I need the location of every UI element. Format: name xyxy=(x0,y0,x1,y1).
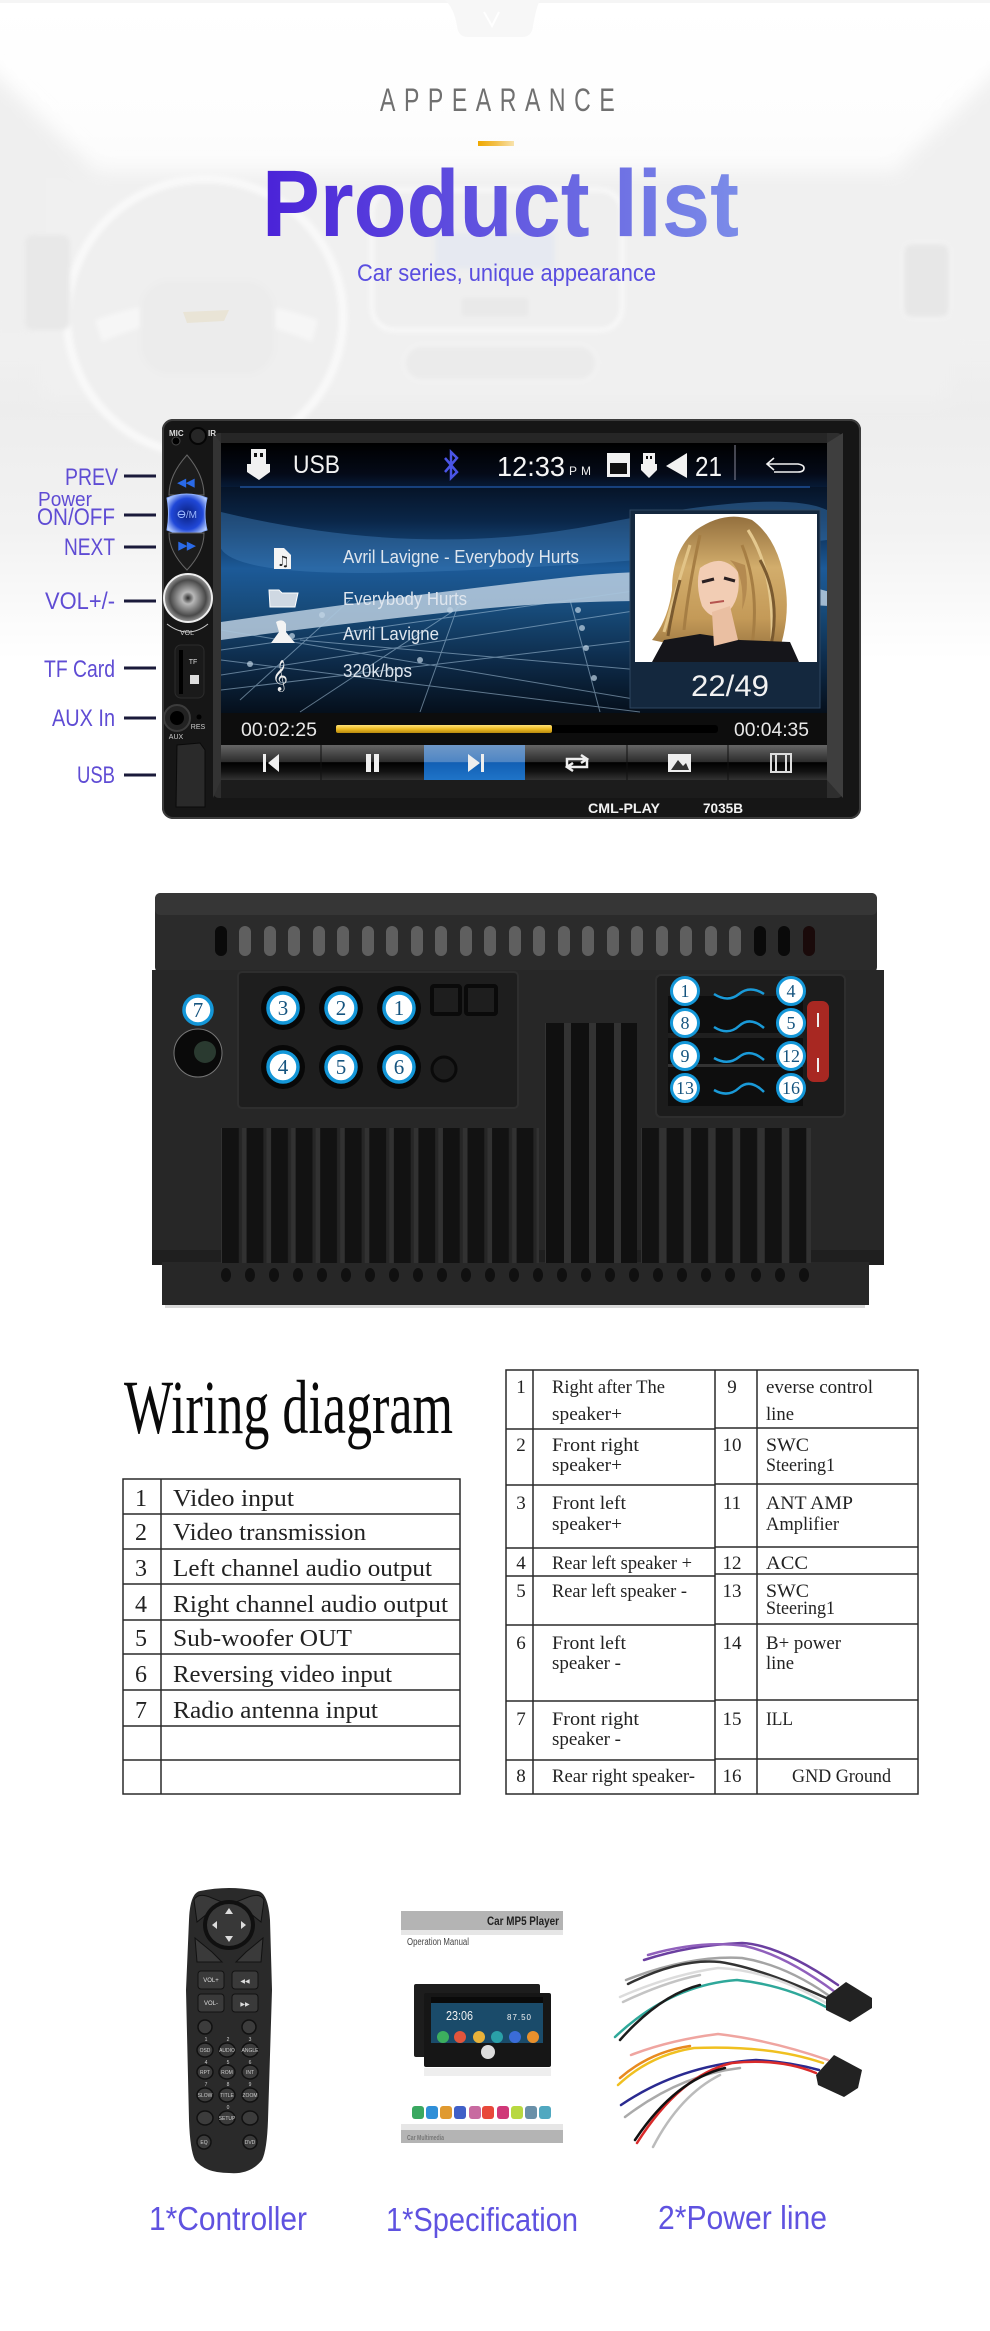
numbers: 14 xyxy=(722,1633,742,1654)
album text: Everybody Hurts xyxy=(343,589,467,609)
prev button xyxy=(169,455,204,495)
label: Power ON/OFF xyxy=(37,489,156,531)
icon: person xyxy=(271,620,295,643)
artist text: Avril Lavigne xyxy=(343,624,439,644)
next button: ▶▶ xyxy=(178,540,196,552)
numbers: 11 xyxy=(723,1493,741,1514)
prev button: ◀◀ xyxy=(177,477,195,489)
numeric key labels: ANGLE xyxy=(242,2048,259,2054)
right descriptions: SWC xyxy=(766,1435,809,1456)
icon: back arrow xyxy=(767,458,804,472)
iso connector panel: 4 xyxy=(786,981,796,1001)
volume number: 21 xyxy=(695,451,722,482)
aux jack: RES xyxy=(191,724,206,731)
clock: 12:33 xyxy=(497,451,565,482)
numeric key labels: INT xyxy=(246,2070,254,2076)
table text: 3 xyxy=(135,1556,147,1582)
lower connector xyxy=(816,2055,862,2097)
left descriptions: speaker - xyxy=(552,1653,621,1674)
left descriptions: Front right xyxy=(552,1709,640,1730)
right descriptions: ANT AMP xyxy=(766,1493,853,1514)
label: NEXT: NEXT xyxy=(64,534,115,561)
icon: folder xyxy=(269,590,298,607)
numeric key labels: OSD xyxy=(200,2048,211,2054)
numbers: 15 xyxy=(722,1709,742,1730)
numeric key labels xyxy=(198,2037,259,2146)
photo xyxy=(635,514,817,662)
table text: 7 xyxy=(135,1698,147,1724)
icon: film xyxy=(771,754,791,772)
lower harness wires xyxy=(618,2034,828,2147)
table text: Left channel audio output xyxy=(173,1556,432,1582)
rca sockets numbered: 4 xyxy=(278,1055,289,1079)
fuse xyxy=(807,1001,829,1082)
numeric key labels: AUDIO xyxy=(219,2048,235,2054)
rca sockets numbered: 6 xyxy=(394,1055,404,1079)
header background: faded car dashboard xyxy=(0,0,990,660)
model text: 7035B xyxy=(703,800,743,816)
left descriptions: speaker - xyxy=(552,1729,621,1750)
numeric keys xyxy=(197,2020,258,2149)
label: VOL+/- xyxy=(45,588,156,615)
heading: APPEARANCE: APPEARANCE xyxy=(380,82,615,118)
numbers: 12 xyxy=(722,1553,742,1574)
right descriptions: everse control xyxy=(766,1377,873,1398)
numbers: 8 xyxy=(516,1766,526,1787)
upper connector xyxy=(826,1982,872,2022)
right descriptions: ILL xyxy=(766,1709,793,1730)
iso connector panel: 13 xyxy=(676,1078,694,1098)
top keys xyxy=(194,1895,264,1962)
icon: treble clef: 𝄞 xyxy=(272,659,288,692)
table text: Sub-woofer OUT xyxy=(173,1626,352,1652)
heading: Wiring diagram: Wiring diagram xyxy=(124,1366,453,1450)
left descriptions: Rear left speaker + xyxy=(552,1553,692,1574)
numbers: 13 xyxy=(722,1581,742,1602)
caption: specification: 1*Specification xyxy=(386,2201,578,2238)
stereo image: 87.50 xyxy=(507,2013,532,2022)
stereo image: 23:06 xyxy=(446,2008,473,2023)
bottom vent holes xyxy=(221,1268,809,1282)
tf card slot: TF xyxy=(189,659,197,666)
d-pad xyxy=(203,1900,255,1950)
icon: repeat xyxy=(567,755,587,771)
numbers: 16 xyxy=(722,1766,742,1787)
tf card slot xyxy=(175,645,204,698)
head unit front view xyxy=(162,419,861,819)
table text: Reversing video input xyxy=(173,1662,392,1688)
right descriptions: Amplifier xyxy=(766,1514,840,1535)
table text: 2 xyxy=(135,1520,147,1546)
clock pm: PM xyxy=(569,464,591,478)
mic and ir: MIC xyxy=(169,429,184,438)
track title: Avril Lavigne - Everybody Hurts xyxy=(343,547,579,567)
label: Power ON/OFF: ON/OFF xyxy=(37,504,115,531)
rca panel xyxy=(238,972,518,1108)
right descriptions: Steering1 xyxy=(766,1598,835,1619)
status bar xyxy=(221,443,827,487)
usb port xyxy=(176,743,205,807)
right descriptions xyxy=(766,1377,891,1787)
numbers: 2 xyxy=(516,1435,526,1456)
right descriptions: ACC xyxy=(766,1553,808,1574)
iso connector panel: 16 xyxy=(782,1078,800,1098)
mic and ir xyxy=(169,428,216,445)
left descriptions: Rear right speaker- xyxy=(552,1766,695,1787)
table text xyxy=(135,1486,448,1724)
antenna socket: 7 xyxy=(193,998,203,1022)
icon: next xyxy=(468,754,484,772)
antenna socket xyxy=(174,996,222,1077)
label: USB xyxy=(77,762,156,789)
numbers: 10 xyxy=(722,1435,742,1456)
manual header xyxy=(401,1911,563,1935)
numeric key labels: 0 xyxy=(227,2105,230,2111)
icon: usb small xyxy=(641,453,657,478)
stereo image xyxy=(414,1984,551,2076)
left descriptions: speaker+ xyxy=(552,1514,622,1535)
rca sockets numbered: 1 xyxy=(394,996,404,1020)
iso connector panel xyxy=(656,975,845,1117)
numeric key labels: 8 xyxy=(227,2082,230,2088)
subtitle: Car series, unique appearance xyxy=(357,260,656,287)
title: Product list: Product list xyxy=(262,151,739,257)
model text xyxy=(588,800,743,816)
numeric key labels: SLOW xyxy=(198,2093,213,2099)
wave marks xyxy=(714,990,764,1094)
round hole xyxy=(432,1057,456,1081)
numbers: 5 xyxy=(516,1581,526,1602)
right descriptions: line xyxy=(766,1404,794,1425)
top vent slots xyxy=(215,926,815,956)
key labels: ◀◀ xyxy=(240,1979,250,1985)
numeric key labels: SETUP xyxy=(219,2116,236,2122)
table: iso wiring xyxy=(506,1370,918,1794)
key labels: ▶▶ xyxy=(240,2002,250,2008)
manual subtitle: Operation Manual xyxy=(407,1937,469,1948)
side controls xyxy=(164,428,216,807)
numbers: 4 xyxy=(516,1553,526,1574)
chassis xyxy=(152,893,884,1308)
video connector outline xyxy=(432,986,496,1014)
operation manual xyxy=(401,1911,563,2143)
mic and ir: IR xyxy=(208,429,216,438)
label: NEXT xyxy=(64,534,156,561)
icon: usb xyxy=(247,449,270,480)
rca sockets numbered: 3 xyxy=(278,996,288,1020)
numeric key labels: 2 xyxy=(227,2037,230,2043)
icon: previous xyxy=(263,754,279,772)
control buttons xyxy=(221,745,827,780)
numbers: 6 xyxy=(516,1633,526,1654)
progress fill xyxy=(336,725,552,733)
numeric key labels: RPT xyxy=(200,2070,210,2076)
label: TF Card: TF Card xyxy=(44,656,115,683)
numeric key labels: DVD xyxy=(245,2140,256,2146)
key labels xyxy=(203,1978,250,2008)
left descriptions: speaker+ xyxy=(552,1404,622,1425)
left descriptions: Right after The xyxy=(552,1377,665,1398)
key labels: VOL- xyxy=(204,2001,218,2007)
numeric key labels: ROM xyxy=(221,2070,233,2076)
wallpaper xyxy=(219,487,830,713)
manual footer xyxy=(401,2124,563,2143)
table text: Video transmission xyxy=(173,1520,366,1546)
power line harnesses xyxy=(615,1943,872,2147)
aux jack: AUX xyxy=(169,734,184,741)
elapsed time: 00:02:25 xyxy=(241,720,317,741)
model text: CML-PLAY xyxy=(588,800,661,816)
manual header: Car MP5 Player xyxy=(487,1914,559,1928)
table: rear ports xyxy=(123,1479,460,1794)
left descriptions: speaker+ xyxy=(552,1455,622,1476)
icon: pause xyxy=(366,754,379,772)
numbers: 3 xyxy=(516,1493,526,1514)
volume knob: VOL xyxy=(180,630,194,637)
volume knob xyxy=(164,574,212,637)
label: USB: USB xyxy=(77,762,115,789)
label: AUX In: AUX In xyxy=(52,705,115,732)
icon: bluetooth xyxy=(445,452,457,478)
numbers xyxy=(516,1377,742,1787)
numeric key labels: 7 xyxy=(205,2082,208,2088)
numbers: 7 xyxy=(516,1709,526,1730)
upper harness wires xyxy=(615,1943,838,2040)
table text: 6 xyxy=(135,1662,147,1688)
app icons xyxy=(412,2106,551,2119)
icon: picture xyxy=(668,754,691,772)
screen xyxy=(219,443,830,780)
right descriptions: GND Ground xyxy=(792,1766,891,1787)
iso connector panel: 5 xyxy=(786,1013,796,1033)
usb source text: USB xyxy=(293,451,340,479)
table text: 4 xyxy=(135,1592,147,1618)
icon: note file xyxy=(274,548,291,570)
numeric key labels: 1 xyxy=(205,2037,208,2043)
left descriptions xyxy=(552,1377,695,1787)
label: VOL+/-: VOL+/- xyxy=(45,588,115,615)
iso connector panel: 8 xyxy=(680,1013,690,1033)
track info rows xyxy=(269,547,579,692)
table text: Radio antenna input xyxy=(173,1698,378,1724)
icon: note file: ♫ xyxy=(277,554,290,570)
album card xyxy=(630,510,820,708)
icon: sd notch xyxy=(610,463,627,474)
numbers: 9 xyxy=(727,1377,737,1398)
manual footer: Car Multimedia xyxy=(407,2135,444,2142)
bitrate text: 320k/bps xyxy=(343,661,412,681)
right descriptions: line xyxy=(766,1653,794,1674)
aux jack xyxy=(164,705,206,741)
label: PREV: PREV xyxy=(65,464,118,491)
track counter: 22/49 xyxy=(691,670,769,703)
left descriptions: Front left xyxy=(552,1493,627,1514)
icon: speaker xyxy=(666,453,687,478)
head unit rear view xyxy=(152,893,884,1308)
numeric key labels: 4 xyxy=(205,2060,208,2066)
rca sockets numbered xyxy=(261,986,421,1089)
table text: 5 xyxy=(135,1626,147,1652)
numeric key labels: ZOOM xyxy=(242,2093,258,2099)
iso connector panel: 9 xyxy=(680,1046,690,1066)
iso connector panel: 12 xyxy=(782,1046,800,1066)
total time: 00:04:35 xyxy=(734,720,809,741)
gold divider xyxy=(478,141,514,146)
icon: sd card xyxy=(607,453,630,477)
key labels: VOL+ xyxy=(203,1978,219,1984)
right descriptions: B+ power xyxy=(766,1633,842,1654)
table grid xyxy=(506,1370,918,1794)
volume and skip keys xyxy=(198,1971,258,2012)
front panel labels xyxy=(37,464,156,789)
numeric key labels: EQ xyxy=(200,2140,208,2146)
caption: power line: 2*Power line xyxy=(658,2199,827,2236)
table text: Right channel audio output xyxy=(173,1592,448,1618)
left descriptions: Front right xyxy=(552,1435,640,1456)
remote controller xyxy=(186,1888,272,2173)
numbers: 1 xyxy=(516,1377,526,1398)
numeric key labels: 9 xyxy=(249,2082,252,2088)
progress bar row xyxy=(221,713,827,745)
left descriptions: Rear left speaker - xyxy=(552,1581,687,1602)
rca sockets numbered: 2 xyxy=(336,996,346,1020)
numeric key labels: 6 xyxy=(249,2060,252,2066)
right descriptions: Steering1 xyxy=(766,1455,835,1476)
table text: 1 xyxy=(135,1486,147,1512)
rca sockets numbered: 5 xyxy=(336,1055,346,1079)
power button xyxy=(167,494,207,534)
left descriptions: Front left xyxy=(552,1633,627,1654)
table grid xyxy=(123,1479,460,1794)
caption: controller: 1*Controller xyxy=(149,2200,307,2237)
numeric key labels: 5 xyxy=(227,2060,230,2066)
right descriptions: SWC xyxy=(766,1581,809,1602)
iso connector panel: 1 xyxy=(680,981,690,1001)
power button: ⴱ/M xyxy=(177,510,197,521)
label: Power ON/OFF: Power xyxy=(38,489,92,511)
cooling fins xyxy=(221,1023,811,1263)
table text: Video input xyxy=(173,1486,294,1512)
numeric key labels: 3 xyxy=(249,2037,252,2043)
next button xyxy=(169,533,204,570)
numeric key labels: TITLE xyxy=(220,2093,234,2099)
